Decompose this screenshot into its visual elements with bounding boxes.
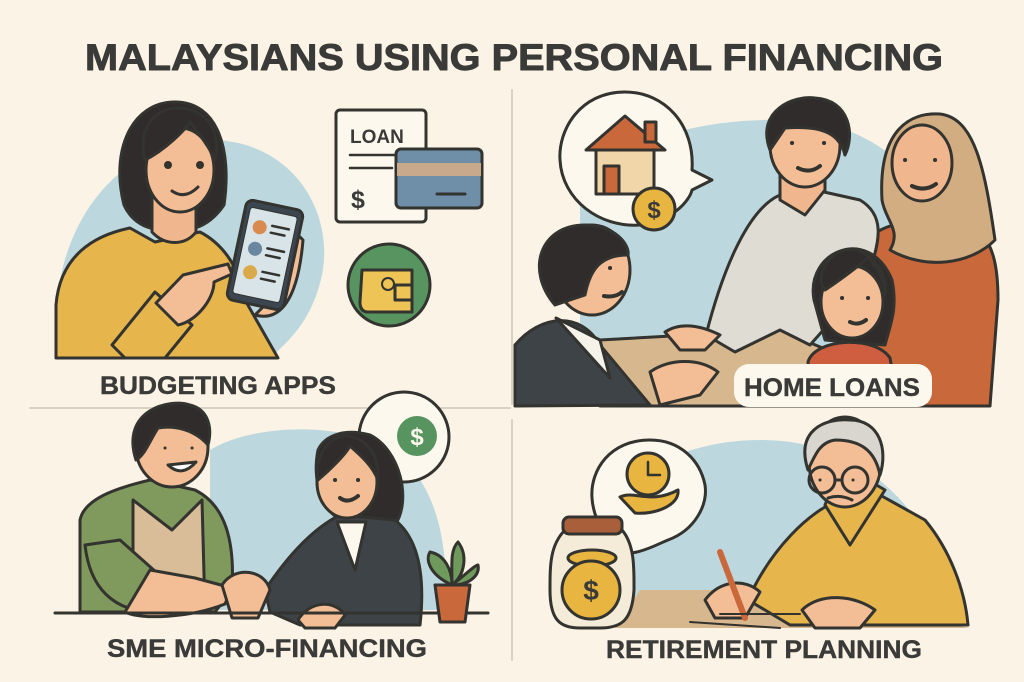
icon: loan document: $: [351, 186, 365, 214]
label: retirement planning: RETIREMENT PLANNING: [606, 636, 922, 664]
table: [600, 330, 960, 406]
daughter: [808, 249, 895, 385]
blue background: [580, 120, 950, 406]
husband: [665, 98, 878, 352]
label: SME micro-financing: SME MICRO-FINANCING: [107, 635, 427, 663]
advisor: [515, 225, 718, 406]
blue background circle: [57, 140, 324, 358]
icon: loan document: [336, 110, 426, 222]
woman pointing hand: [156, 264, 232, 325]
title: MALAYSIANS USING PERSONAL FINANCING: [85, 37, 943, 78]
icon: dollar bubble: $: [410, 424, 424, 451]
label: budgeting apps: BUDGETING APPS: [100, 372, 336, 400]
label: home loans: HOME LOANS: [744, 374, 920, 402]
wife: [868, 114, 998, 406]
icon: coin: $: [647, 197, 661, 224]
icon: clock hand bubble: [592, 440, 705, 555]
label: home loans: [734, 364, 932, 407]
icon: phone: [226, 199, 304, 311]
table: [615, 590, 970, 628]
icon: house speech bubble: [560, 92, 712, 225]
icon: savings jar: [550, 517, 634, 628]
panel: SME micro-financing: [55, 392, 488, 628]
panel: retirement planning: [550, 417, 970, 628]
icon: coin: [633, 188, 675, 230]
panel: home loans: [515, 92, 998, 407]
icon: savings jar: $: [583, 575, 599, 606]
shopkeeper: [80, 403, 233, 617]
icon: dollar bubble: [359, 392, 449, 482]
senior man: [690, 417, 968, 628]
panel: budgeting apps: [56, 102, 482, 358]
woman sweater: [56, 228, 278, 358]
woman neck and face: [152, 190, 196, 242]
icon: loan document: LOAN: [350, 127, 404, 148]
blue background: [210, 429, 446, 610]
blue background: [600, 440, 950, 610]
icon: plant: [428, 542, 478, 622]
handshake: [222, 572, 270, 618]
icon: wallet: [348, 244, 430, 326]
icon: woman hair: [120, 102, 226, 228]
businesswoman: [265, 432, 422, 628]
woman other hand: [255, 235, 303, 316]
icon: credit card: [396, 149, 482, 208]
woman forearm sleeve: [112, 292, 192, 358]
